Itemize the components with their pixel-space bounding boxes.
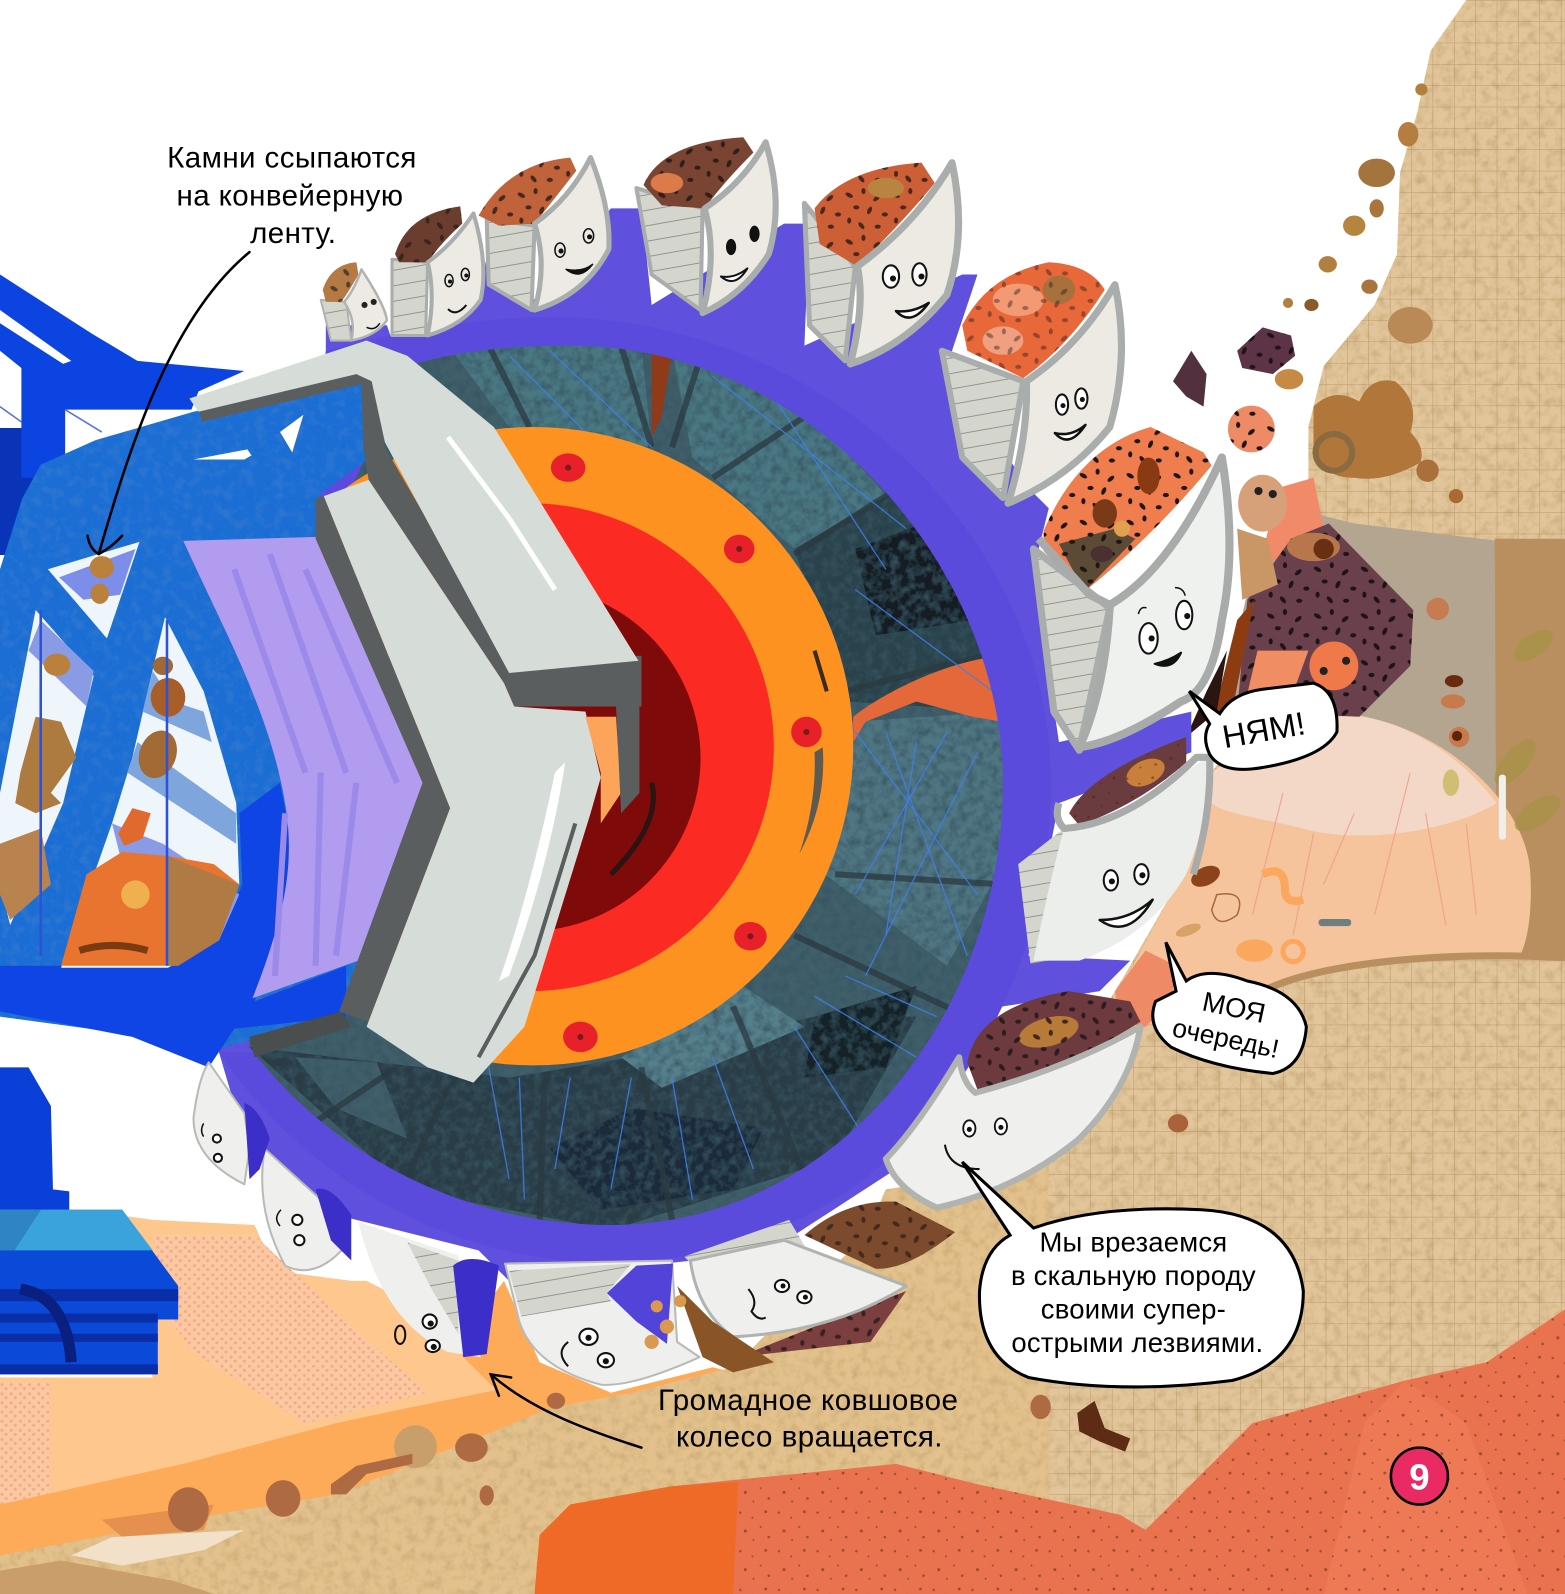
- dark right segment: [794, 496, 980, 708]
- callout: we cut into rock: в скальную породу: [1011, 1260, 1256, 1291]
- bottom dark areas: [249, 1017, 916, 1230]
- bucket 4: [636, 137, 776, 313]
- maroon rock: [1237, 524, 1413, 717]
- pale top of hill: [1212, 716, 1497, 836]
- hill speckle: [733, 1309, 1565, 1594]
- arrow: rocks to conveyor: [88, 252, 249, 554]
- red hub ring: [285, 503, 774, 991]
- bucket 1: [321, 262, 387, 341]
- bucket 8: [1018, 737, 1210, 964]
- callout: my turn: [1153, 942, 1306, 1074]
- orange root: [853, 656, 1003, 742]
- bucket 9: [886, 991, 1140, 1208]
- far-left dark frame: [0, 428, 35, 555]
- purple ring: [219, 317, 1051, 1263]
- callout: we cut into rock: острыми лезвиями.: [1011, 1327, 1263, 1358]
- orange hub: [214, 427, 853, 1065]
- rock trail: [168, 1487, 209, 1532]
- upper dark band: [199, 368, 641, 707]
- orange sand band: [0, 1388, 550, 1566]
- brown strip: [1495, 539, 1565, 958]
- text: wheel rotates: Громадное ковшовое: [658, 1384, 958, 1417]
- orange hill: [535, 1482, 738, 1594]
- dark red hub: [354, 586, 701, 931]
- lighter hill: [1324, 1381, 1527, 1594]
- window rock pile left: [0, 829, 51, 920]
- bucket 7: [1033, 427, 1229, 750]
- left window: [0, 610, 94, 925]
- orange and grey hub cap: [585, 717, 621, 823]
- callout: we cut into rock: своими супер-: [1041, 1294, 1226, 1325]
- round coral rock: [1228, 406, 1275, 452]
- ring teeth behind buckets: [219, 208, 1191, 1281]
- grey-brown rock band: [1212, 513, 1499, 813]
- orange sand under buckets: [448, 1281, 733, 1418]
- hub bolts: [551, 453, 822, 1052]
- callout: yum: [1189, 683, 1337, 769]
- bottom dark edge: [249, 1011, 351, 1057]
- text: rocks pour onto belt: Камни ссыпаются: [167, 142, 417, 175]
- callout: yum: НЯМ!: [1220, 705, 1308, 755]
- pink speckled area: [153, 1235, 428, 1423]
- callout: we cut into rock: [962, 1162, 1303, 1387]
- tan ground: [0, 1169, 1049, 1594]
- white cut-outs: [193, 449, 251, 459]
- wheel interior: [244, 335, 1018, 1230]
- panel: excavator arm body: [0, 274, 428, 1067]
- light teal top segment: [448, 346, 652, 447]
- bucket 10: [684, 1201, 955, 1357]
- brown stain rocks: [1314, 380, 1422, 479]
- dome body: [0, 376, 428, 1047]
- purple chute: [183, 537, 426, 998]
- panel: bucket wheel: [214, 208, 1191, 1281]
- upper struts: [0, 274, 244, 478]
- arrow: wheel rotates: [491, 1374, 641, 1448]
- bucket 5: [804, 163, 959, 364]
- panel: falling rocks near cliff: [1115, 83, 1565, 1132]
- panel: bottom ground layers: [0, 1169, 1565, 1594]
- bucket 11: [505, 1261, 774, 1385]
- page number badge: 9: [1409, 1456, 1430, 1497]
- text: rocks pour onto belt: ленту.: [250, 217, 336, 250]
- page number badge: [1391, 1448, 1448, 1505]
- lower strong blue: [0, 783, 346, 1067]
- bucket 14: [193, 1062, 270, 1184]
- coral rubble under second bucket: [1115, 951, 1176, 1027]
- coral rock cluster: [1263, 478, 1324, 564]
- panel: tracked base: [0, 1067, 178, 1374]
- bucket 3: [479, 158, 609, 310]
- window rock pile right: [61, 852, 239, 966]
- lower dark band: [316, 496, 450, 1022]
- panel: grey bracket: [189, 341, 641, 1083]
- bucket 2: [392, 206, 483, 335]
- spokes: [305, 346, 1003, 1220]
- dark purple rock: [1237, 327, 1295, 374]
- text: rocks pour onto belt: на конвейерную: [176, 179, 403, 212]
- callout: my turn: очередь!: [1170, 1012, 1282, 1064]
- bucket 12: [358, 1222, 499, 1357]
- top window: [48, 542, 139, 638]
- small rock dots on grey band: [1427, 598, 1449, 620]
- bucket 6: [942, 262, 1121, 503]
- red-orange hills: [535, 1309, 1565, 1594]
- peach hill: [1130, 716, 1531, 996]
- lower slab: [324, 480, 601, 1083]
- text: wheel rotates: колесо вращается.: [676, 1421, 943, 1454]
- upper slab: [189, 341, 638, 673]
- callout: we cut into rock: Мы врезаемся: [1039, 1226, 1227, 1257]
- bucket 13: [262, 1149, 351, 1270]
- callout: my turn: МОЯ: [1200, 986, 1268, 1029]
- panel: top buckets: [193, 137, 1229, 1385]
- right window: [61, 617, 239, 968]
- panel: paper cliff background: [916, 0, 1565, 1594]
- vertical poles: [41, 610, 167, 966]
- right lower lighter: [825, 712, 1003, 966]
- pale peach sand: [0, 1215, 611, 1566]
- falling rock blobs: [90, 556, 114, 578]
- hill base line: [1263, 956, 1565, 991]
- blue scratches: [489, 351, 993, 1200]
